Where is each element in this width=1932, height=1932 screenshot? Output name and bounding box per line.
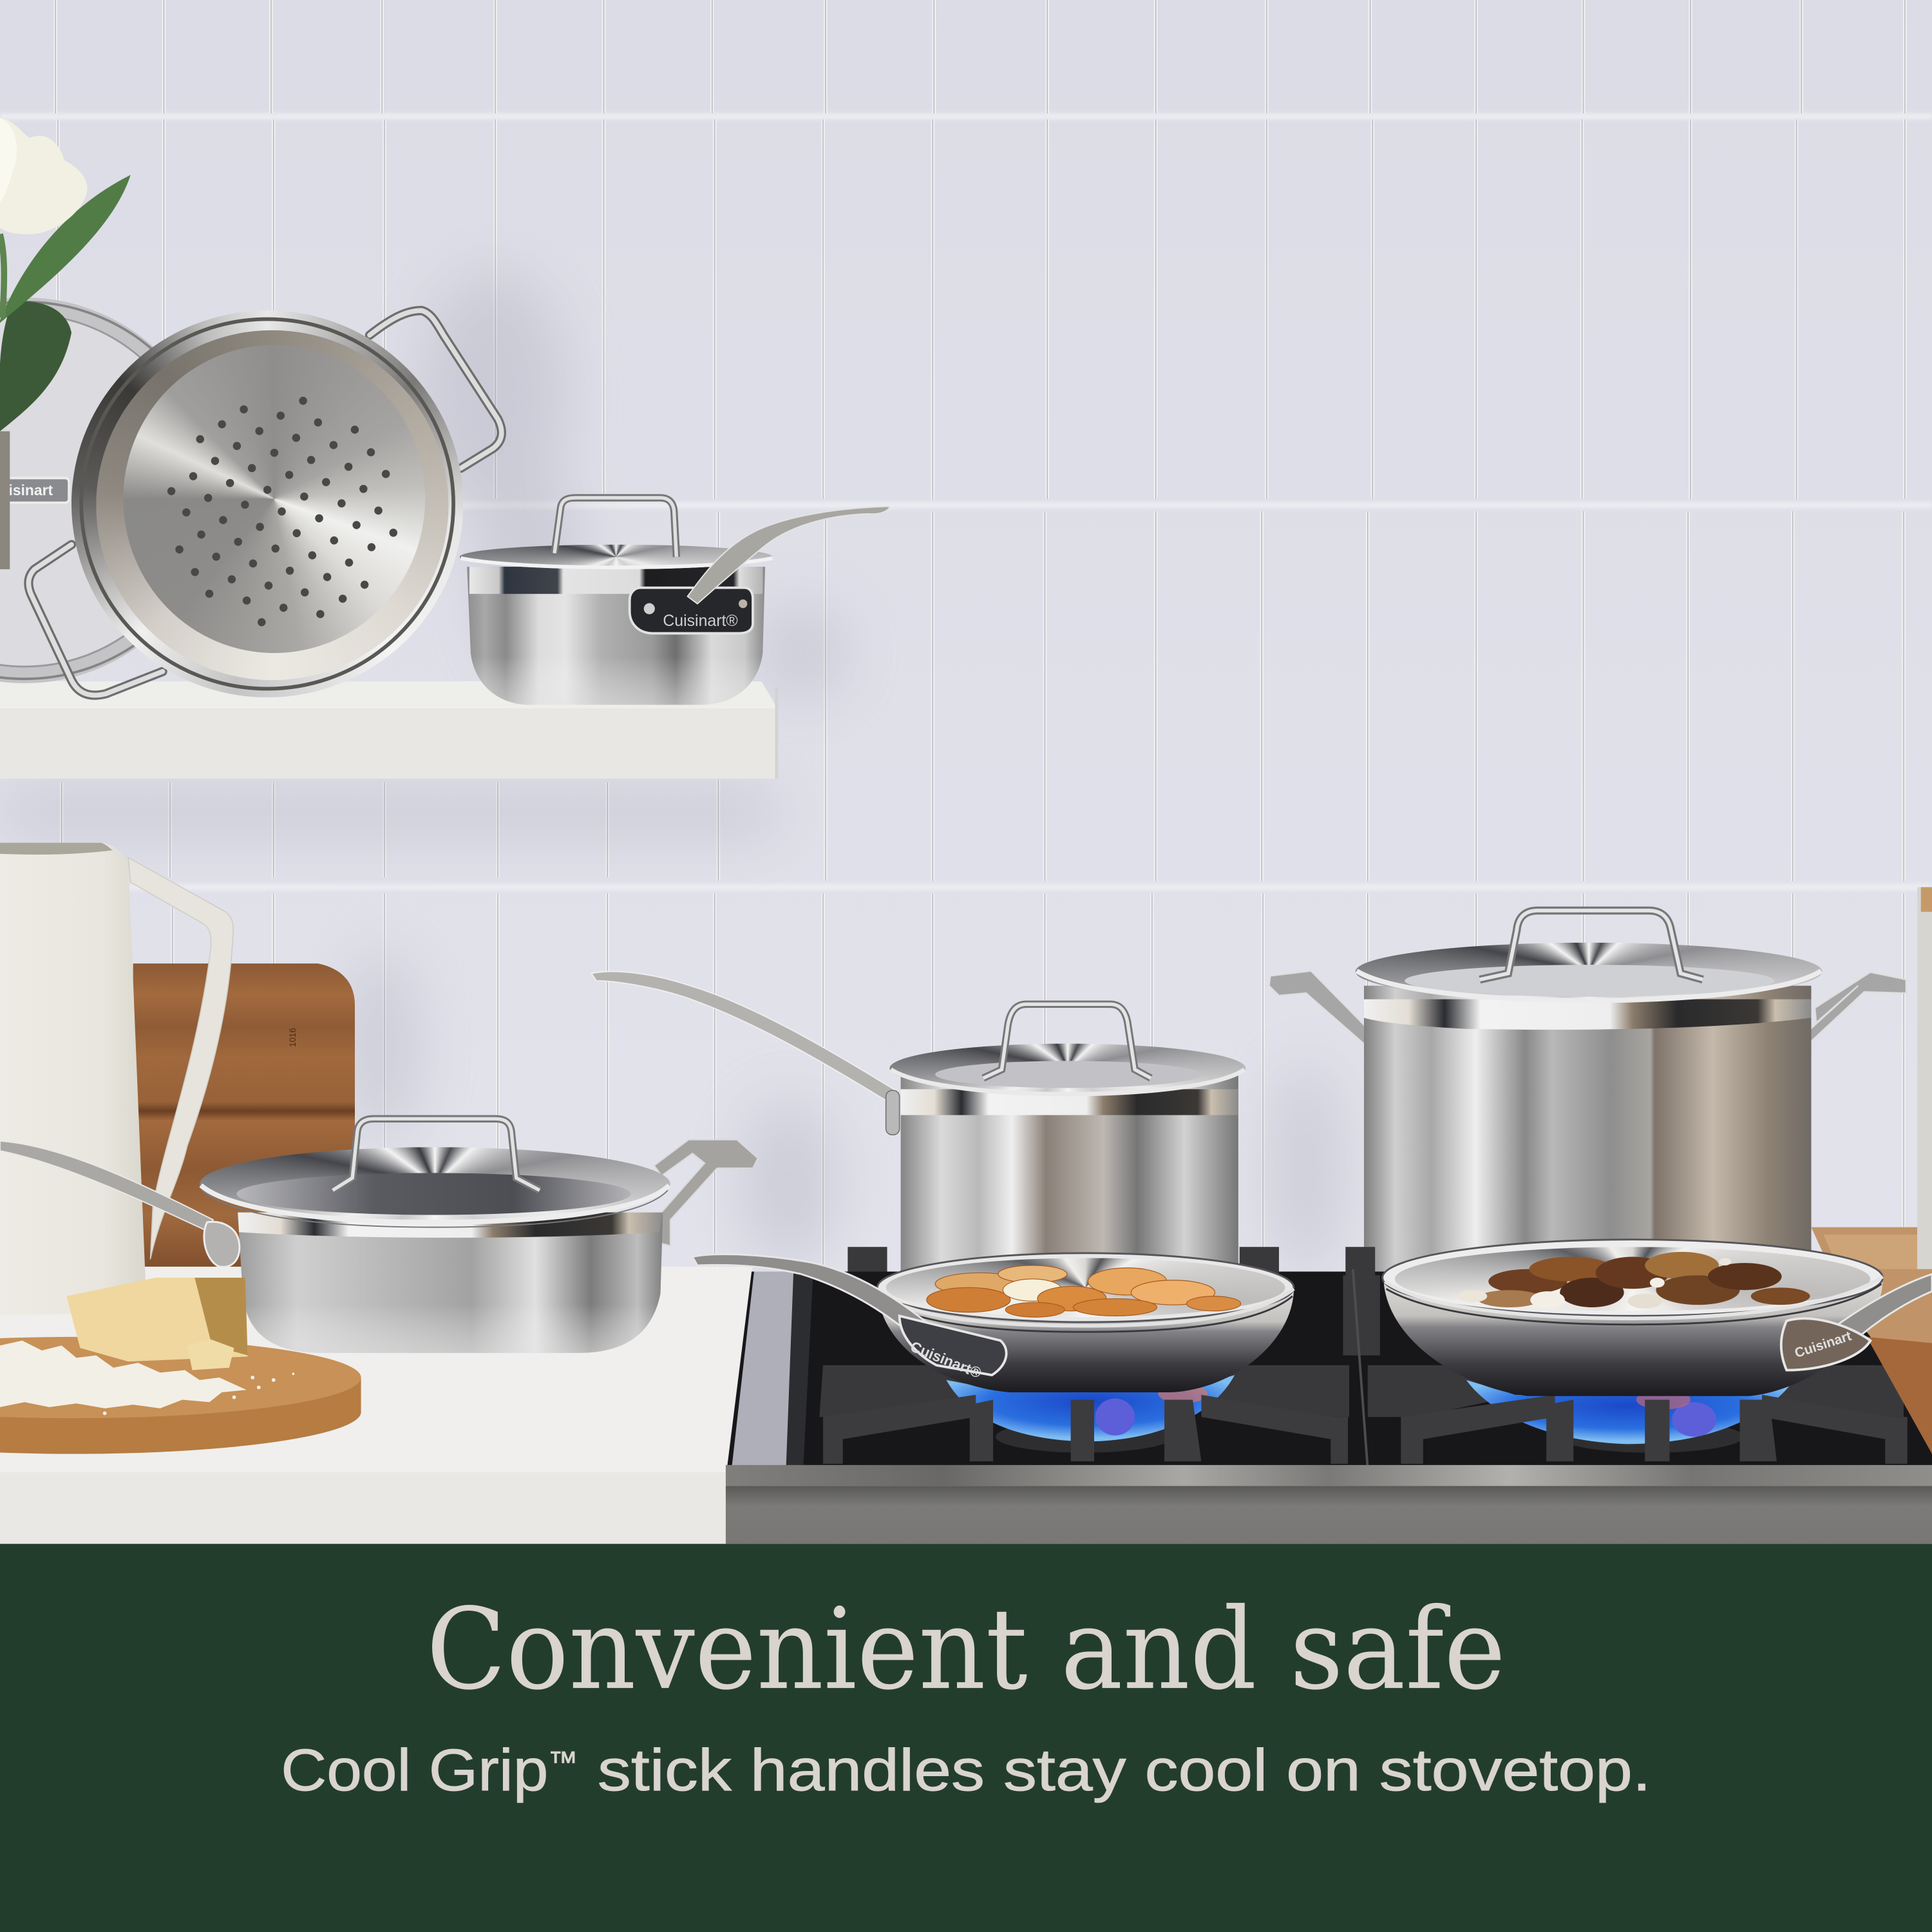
saute lid handle bbox=[333, 1119, 540, 1190]
mushrooms bbox=[1457, 1252, 1810, 1309]
steamer top handle bbox=[370, 310, 502, 468]
frying pan bowl bbox=[877, 1291, 1294, 1392]
saute rivet plate bbox=[204, 1222, 240, 1267]
stockpot right handle bbox=[1803, 972, 1906, 1074]
gas stove bbox=[726, 1247, 1932, 1544]
small saucepan on shelf bbox=[460, 498, 889, 705]
right pan interior bbox=[1395, 1247, 1870, 1311]
saucepan stick handle bbox=[688, 506, 889, 604]
heading: Convenient and safe bbox=[426, 1584, 1506, 1715]
saute reflection band bbox=[238, 1213, 663, 1238]
saute lip bbox=[201, 1186, 669, 1222]
pitcher handle bbox=[128, 858, 233, 1259]
left stove panel bbox=[732, 1271, 803, 1466]
saute lid glass bbox=[236, 1173, 631, 1215]
grate fins right bbox=[1401, 1395, 1908, 1464]
caption band bbox=[0, 1544, 1932, 1932]
frying pan handle bbox=[692, 1255, 955, 1358]
grate fins left bbox=[823, 1395, 1348, 1464]
center divider bbox=[1353, 1269, 1368, 1469]
right pan logo: Cuisinart bbox=[1793, 1329, 1853, 1361]
medium saucepan stick handle bbox=[591, 972, 896, 1103]
wall shelf bbox=[0, 681, 778, 779]
vase bbox=[0, 431, 10, 569]
medium saucepan lid bbox=[889, 1044, 1245, 1093]
medium saucepan body bbox=[901, 1074, 1238, 1271]
parmesan wedge bbox=[66, 1278, 248, 1361]
steamer rim bbox=[71, 310, 463, 697]
medium saucepan rivet plate bbox=[886, 1090, 900, 1135]
grated cheese bbox=[0, 1341, 294, 1415]
tall stockpot bbox=[1269, 911, 1906, 1271]
kitchen counter bbox=[0, 1267, 753, 1544]
saucepan handle plate bbox=[630, 588, 753, 633]
steamer inner wall bbox=[96, 330, 448, 680]
burner grate left back bbox=[819, 1247, 1349, 1417]
round board side bbox=[0, 1378, 361, 1454]
saucepan reflection band bbox=[469, 567, 762, 594]
right pan handle bbox=[1821, 1274, 1932, 1353]
burner caps bbox=[996, 1421, 1743, 1453]
saucepan lid handle bbox=[554, 498, 676, 557]
left frying pan with scallops bbox=[692, 1253, 1294, 1392]
steamer insert bbox=[28, 310, 502, 697]
cooktop interior bbox=[727, 1271, 1932, 1469]
subheading: stick handles stay cool on stovetop. bbox=[598, 1738, 1651, 1803]
subheading bbox=[281, 1738, 1651, 1803]
tulips and vase bbox=[0, 117, 131, 569]
round cutting board with parmesan bbox=[0, 1278, 361, 1454]
saucepan lip bbox=[461, 558, 773, 567]
medium saucepan lip bbox=[891, 1070, 1244, 1094]
medium saucepan bbox=[591, 972, 1245, 1271]
steamer base bbox=[123, 345, 425, 653]
saute body bbox=[238, 1214, 663, 1353]
bamboo cutting board bbox=[133, 963, 355, 1278]
saucepan body bbox=[467, 567, 765, 705]
stockpot left handle bbox=[1269, 971, 1383, 1074]
background lid bbox=[0, 302, 217, 679]
round board top bbox=[0, 1337, 361, 1418]
medium saucepan lid handle bbox=[983, 1004, 1151, 1078]
frying pan interior bbox=[886, 1258, 1285, 1317]
frying pan handle plate bbox=[900, 1316, 1007, 1375]
stove front panel bbox=[726, 1486, 1932, 1544]
burner grate right back bbox=[1343, 1247, 1904, 1417]
stockpot lid handle bbox=[1480, 911, 1703, 980]
leaves bbox=[0, 301, 71, 431]
scallops bbox=[927, 1265, 1241, 1317]
saucepan lid bbox=[460, 545, 773, 569]
saute long handle bbox=[0, 1141, 213, 1231]
steamer dark lip bbox=[81, 319, 453, 689]
bamboo cutting board: 1016 bbox=[288, 1028, 298, 1047]
flames left bbox=[946, 1375, 1235, 1442]
flames right bbox=[1466, 1380, 1790, 1444]
right pan bowl bbox=[1384, 1282, 1882, 1396]
saute lid bbox=[200, 1147, 670, 1221]
tulip flower bbox=[0, 117, 87, 234]
stockpot lid bbox=[1356, 943, 1823, 1001]
stockpot lid glass bbox=[1405, 965, 1774, 997]
frying pan logo: Cuisinart® bbox=[908, 1338, 984, 1381]
steamer holes bbox=[167, 397, 397, 626]
frying pan rim highlight bbox=[878, 1289, 1294, 1326]
right pan rim highlight bbox=[1385, 1276, 1882, 1318]
wooden board right bbox=[1811, 1227, 1932, 1454]
white pitcher bbox=[0, 843, 233, 1314]
stockpot lip bbox=[1357, 971, 1821, 1001]
lid handle with logo bbox=[0, 478, 69, 503]
steamer bottom handle bbox=[28, 545, 163, 696]
medium saucepan lid glass bbox=[935, 1061, 1201, 1088]
right frying pan with mushrooms bbox=[1383, 1240, 1932, 1396]
glass jar right bbox=[1917, 887, 1932, 1269]
wall shadows bbox=[0, 271, 1343, 1282]
saute pan with lid bbox=[0, 1119, 758, 1353]
frying pan rim bbox=[877, 1253, 1294, 1322]
subheading: Cool Grip bbox=[281, 1738, 548, 1803]
stockpot body bbox=[1364, 986, 1811, 1271]
right pan rim bbox=[1383, 1240, 1882, 1316]
right pan handle plate bbox=[1781, 1318, 1870, 1370]
subheading: ™ bbox=[548, 1745, 578, 1778]
saute helper handle bbox=[654, 1140, 758, 1245]
medium saucepan reflection band bbox=[901, 1089, 1238, 1115]
stove front ledge bbox=[726, 1465, 1932, 1486]
saucepan logo: Cuisinart® bbox=[663, 612, 738, 630]
stockpot reflection band bbox=[1364, 999, 1811, 1030]
